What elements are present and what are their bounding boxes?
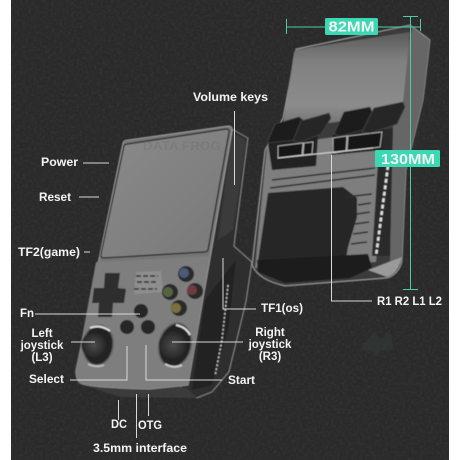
- label: Right joystick (R3): joystick: [248, 339, 292, 351]
- rear shell outline: [252, 25, 430, 286]
- trigger buttons: [267, 117, 303, 143]
- label: Volume keys: Volume keys: [193, 92, 268, 104]
- label: R1 R2 L1 L2: R1 R2 L1 L2: [377, 296, 442, 308]
- label: 3.5mm interface: 3.5mm interface: [93, 443, 187, 455]
- watermark: screen text: DATA FROG: [143, 141, 221, 153]
- spring column: [372, 128, 393, 256]
- front console: [76, 126, 252, 398]
- badge: 130MM: 130MM: [381, 151, 435, 168]
- label: Start: Start: [228, 375, 255, 387]
- label: Reset: Reset: [39, 192, 71, 204]
- Fn, select and start buttons: [134, 304, 148, 318]
- label: Right joystick (R3): (R3): [259, 351, 281, 363]
- label: OTG: OTG: [138, 420, 162, 432]
- label: TF2(game): TF2(game): [18, 247, 80, 259]
- speaker grille: [134, 271, 163, 294]
- left joystick: [80, 323, 116, 367]
- white callout lines: [35, 111, 372, 438]
- badge: 82MM: 82MM: [328, 18, 374, 36]
- label: Right joystick (R3): Right: [255, 327, 285, 339]
- console front panel: [76, 126, 232, 389]
- rear console: [252, 25, 430, 286]
- action buttons: [178, 266, 194, 282]
- label: Select: Select: [29, 374, 64, 386]
- console bottom edge: [77, 372, 197, 398]
- dark battery block: [257, 187, 357, 268]
- right joystick: [154, 320, 196, 370]
- label: Left joystick (L3): Left: [31, 328, 53, 340]
- label: DC: DC: [111, 419, 127, 431]
- rear bottom detail: [257, 254, 372, 283]
- trigger cavities: [268, 128, 384, 170]
- rib lines: [270, 168, 375, 244]
- rear side rail: [390, 28, 430, 272]
- green dimension lines: [286, 16, 420, 290]
- d-pad: [92, 273, 126, 317]
- label: Power: Power: [41, 157, 79, 169]
- label: Left joystick (L3): (L3): [31, 352, 53, 364]
- screen: [101, 129, 229, 258]
- console side grip: [180, 128, 252, 398]
- ribbed mid section: [255, 130, 388, 268]
- battery compartment inner panel: [282, 32, 410, 130]
- watermark: frog logo: [362, 333, 393, 357]
- label: TF1(os): TF1(os): [261, 303, 303, 315]
- label: Left joystick (L3): joystick: [20, 340, 64, 352]
- label: Fn: Fn: [20, 308, 34, 320]
